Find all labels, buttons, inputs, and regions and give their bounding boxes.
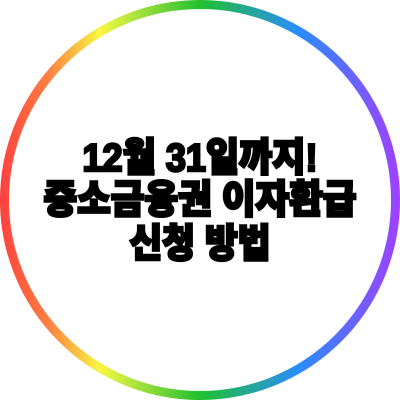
title line 2: 중소금융권 이자환급 [44, 179, 356, 222]
title line 1: 12월 31일까지! [82, 137, 318, 180]
title [44, 137, 356, 266]
title line 3: 신청 방법 [130, 223, 270, 266]
